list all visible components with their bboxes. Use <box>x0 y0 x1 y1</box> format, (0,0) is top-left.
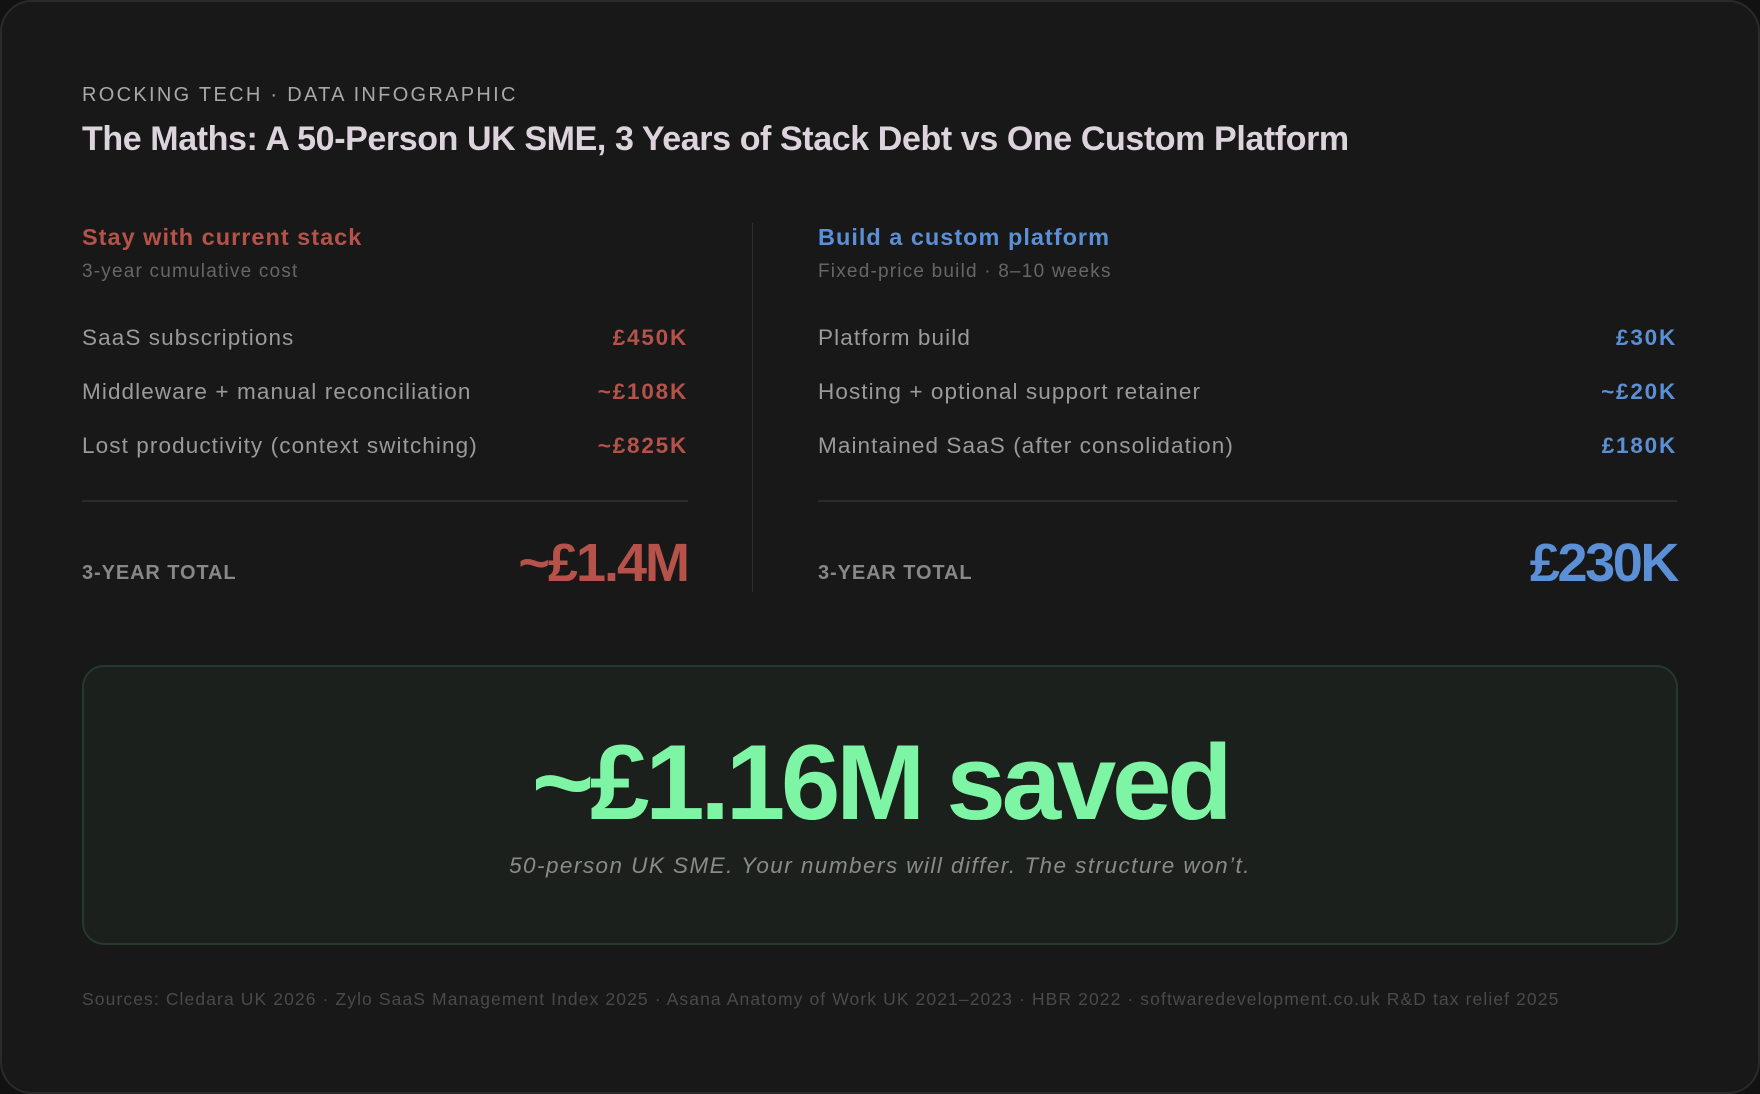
total: 3-YEAR TOTAL <box>818 562 973 584</box>
eyebrow: ROCKING TECH · DATA INFOGRAPHIC <box>82 84 518 106</box>
row: hosting: ~£20K <box>1601 379 1677 404</box>
subheading: 3-year cumulative cost <box>82 261 298 282</box>
total: £230K <box>1530 533 1677 593</box>
big savings figure: ~£1.16M saved <box>532 722 1228 842</box>
row: platform build <box>818 325 1677 350</box>
row: SaaS subscriptions: SaaS subscriptions <box>82 325 294 350</box>
row: maintained SaaS: Maintained SaaS (after consolidation) <box>818 433 1234 458</box>
row: platform build: Platform build <box>818 325 971 350</box>
caption: 50-person UK SME. Your numbers will differ. The structure won’t. <box>509 853 1251 878</box>
row: middleware: Middleware + manual reconciliation <box>82 379 471 404</box>
row: maintained SaaS: £180K <box>1602 433 1677 458</box>
total: 3-YEAR TOTAL <box>82 562 237 584</box>
heading: Build a custom platform <box>818 224 1110 250</box>
title: The Maths: A 50-Person UK SME, 3 Years of Stack Debt vs One Custom Platform <box>82 120 1349 158</box>
row: middleware: ~£108K <box>598 379 688 404</box>
row: lost productivity: Lost productivity (context switching) <box>82 433 478 458</box>
total: ~£1.4M <box>518 533 688 593</box>
total <box>82 533 688 593</box>
panel: stay with current stack <box>82 224 688 593</box>
total <box>818 533 1679 593</box>
row: hosting <box>818 379 1677 404</box>
savings callout <box>82 665 1678 945</box>
row: hosting: Hosting + optional support retainer <box>818 379 1201 404</box>
row: platform build: £30K <box>1616 325 1677 350</box>
row: lost productivity <box>82 433 688 458</box>
row: lost productivity: ~£825K <box>598 433 688 458</box>
sources: Sources: Cledara UK 2026 · Zylo SaaS Management Index 2025 · Asana Anatomy of Work UK 2021–2023 · HBR 2022 · softwaredevelopment.co.uk R&D tax relief 2025 <box>82 989 1559 1009</box>
row: SaaS subscriptions: £450K <box>613 325 688 350</box>
panel: build a custom platform <box>818 224 1679 593</box>
heading: Stay with current stack <box>82 224 362 250</box>
row: maintained SaaS <box>818 433 1677 458</box>
row: SaaS subscriptions <box>82 325 688 350</box>
subheading: Fixed-price build · 8–10 weeks <box>818 261 1112 282</box>
row: middleware <box>82 379 688 404</box>
